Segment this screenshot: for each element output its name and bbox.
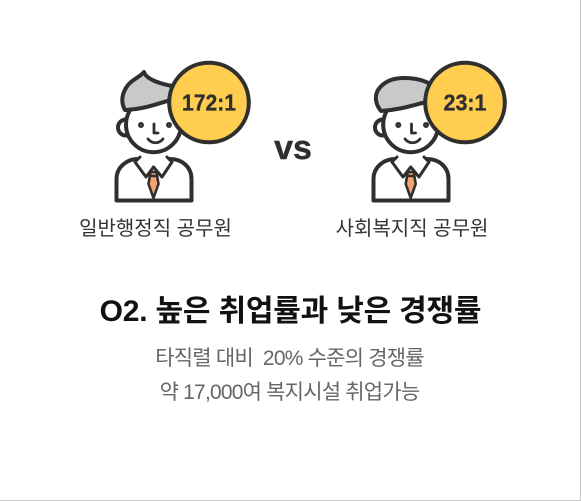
text block: description: 약 17,000여 복지시설 취업가능 [160, 381, 419, 404]
badge: 172:1: 172:1 [182, 90, 236, 116]
illustration: comparison of two civil servants [114, 60, 507, 202]
heading: O2. 높은 취업률과 낮은 경쟁률 [100, 295, 481, 328]
icon: general civil servant with 172:1 badge [116, 63, 249, 201]
text block: description: 타직렬 대비 20% 수준의 경쟁률 [155, 347, 424, 370]
label: general civil servant: 일반행정직 공무원 [79, 218, 232, 240]
icon: social welfare civil servant with 23:1 badge [374, 63, 505, 201]
label: social welfare civil servant: 사회복지직 공무원 [336, 218, 488, 240]
badge: 23:1: 23:1 [444, 90, 487, 116]
label: vs: vs [274, 129, 312, 167]
text block: description [155, 347, 424, 404]
